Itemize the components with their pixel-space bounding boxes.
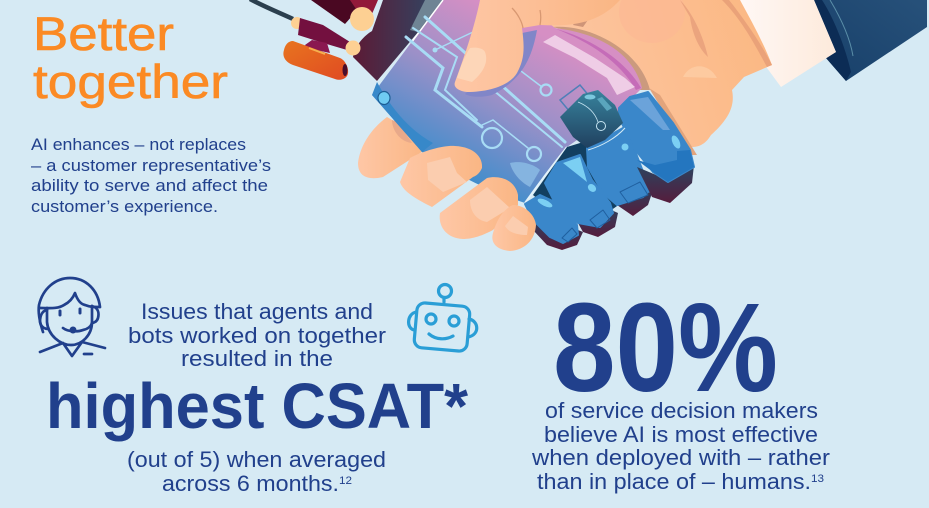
middle finger [400,146,482,207]
jacket sleeve [814,0,927,81]
orange capsule [283,40,348,80]
text: service decision makers: 13 [811,473,824,485]
icon: customer service agent [39,278,105,356]
dark hand base [533,140,640,225]
icon: robot face [409,284,477,352]
text: CSAT detail [127,447,386,496]
human thumb [455,0,620,97]
title: Better [33,7,174,60]
circuit sleeve [372,0,642,203]
text: service decision makers: than in place of – humans. [537,469,811,494]
wrist of human hand [470,0,772,147]
robot finger one [619,92,694,203]
robot finger two [587,128,652,216]
intro text: customer’s experience. [31,197,218,216]
title: together [33,55,228,108]
robot fingers [525,90,694,250]
text: service decision makers [531,398,831,494]
text: service decision makers: when deployed with – rather [531,445,831,470]
intro text: – a customer representative’s [31,156,271,175]
illustration: robot and human handshake [250,0,927,251]
pinky finger [492,205,536,251]
text: service decision makers: of service decision makers [545,398,818,423]
stat: 80%: 80% [553,277,778,418]
text: issues that agents and bots [128,299,387,371]
text: CSAT detail: 12 [339,475,352,487]
text: issues that agents and bots: resulted in the [181,346,333,371]
text: service decision makers: believe AI is most effective [544,422,818,447]
robot finger three [545,155,618,237]
title [33,7,228,108]
robot arm and cables [250,0,445,81]
text: issues that agents and bots: Issues that agents and [141,299,373,324]
teal knuckle [560,90,625,150]
intro text [31,135,271,216]
text: CSAT detail: (out of 5) when averaged [127,447,386,472]
human fingers [400,146,536,251]
shirt cuff [736,0,836,87]
palm creases and shading [553,0,772,155]
robot finger four [525,195,583,250]
heading: highest CSAT: highest CSAT* [46,370,468,442]
back finger [358,117,425,178]
text: issues that agents and bots: bots worked on together [128,323,387,348]
text: CSAT detail: across 6 months. [162,471,339,496]
intro text: ability to serve and affect the [31,176,268,195]
intro text: AI enhances – not replaces [31,135,246,154]
ring finger [440,177,518,239]
